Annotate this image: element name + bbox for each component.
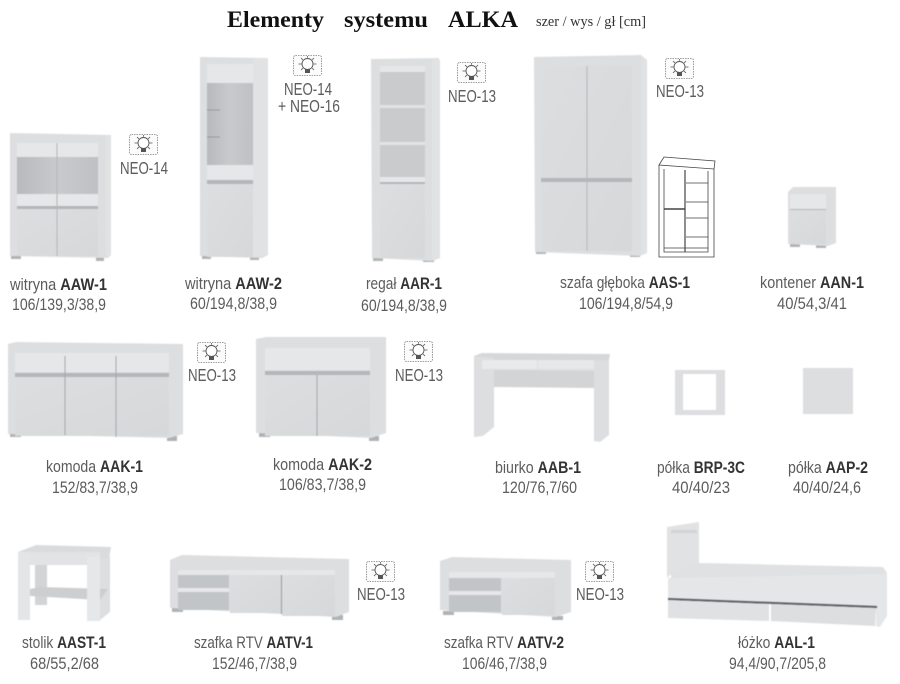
label: komoda AAK-2: komoda AAK-2 — [273, 455, 372, 474]
title — [227, 7, 646, 32]
light icon and label: NEO-13: NEO-13 — [357, 584, 405, 604]
label: kontener AAN-1 — [760, 273, 864, 313]
label: witryna AAW-1: 106/139,3/38,9 — [12, 295, 106, 314]
light icon and label: NEO-13 — [656, 58, 704, 101]
label: komoda AAK-1: komoda AAK-1 — [46, 457, 143, 476]
light icon and label: NEO-13 — [395, 342, 443, 385]
label: szafka RTV AATV-1: 152/46,7/38,9 — [212, 654, 297, 673]
label: szafka RTV AATV-1: szafka RTV AATV-1 — [194, 633, 313, 652]
label: lozko AAL-1 — [729, 633, 826, 673]
cabinet: komoda AAK-1 — [8, 342, 183, 441]
light icon and label: NEO-13: NEO-13 — [395, 365, 443, 385]
cabinet: szafa gleboka AAS-1 — [534, 55, 647, 257]
label: lozko AAL-1: łóżko AAL-1 — [738, 633, 815, 652]
cabinet: komoda AAK-2 — [256, 337, 386, 441]
cabinet: kontener AAN-1 — [788, 187, 836, 248]
desk: biurko AAB-1 — [474, 353, 610, 442]
label: polka BRP-3C: 40/40/23 — [672, 478, 730, 497]
label: witryna AAW-2 — [184, 274, 282, 313]
label: biurko AAB-1: 120/76,7/60 — [502, 478, 577, 497]
title: systemu — [344, 7, 428, 32]
light icon and label: NEO-13: NEO-13 — [188, 365, 236, 385]
label: witryna AAW-2: 60/194,8/38,9 — [190, 294, 277, 313]
label: stolik AAST-1: stolik AAST-1 — [22, 633, 106, 652]
cabinet: szafka RTV AATV-1 — [170, 555, 349, 620]
label: polka BRP-3C: półka BRP-3C — [657, 458, 745, 477]
title: Elementy — [227, 7, 325, 32]
label: szafka RTV AATV-2: szafka RTV AATV-2 — [444, 633, 564, 652]
label: kontener AAN-1: kontener AAN-1 — [760, 273, 864, 292]
light icon and label: NEO-13: NEO-13 — [448, 86, 496, 106]
light icon and label: NEO-14 — [120, 134, 168, 178]
table: stolik AAST-1 — [18, 545, 111, 621]
title: ALKA — [448, 7, 518, 32]
label: komoda AAK-1: 152/83,7/38,9 — [52, 478, 138, 497]
cabinet: witryna AAW-1 — [10, 133, 111, 261]
cabinet: witryna AAW-2 — [200, 57, 268, 260]
light icon and label: NEO-13 — [576, 562, 624, 604]
label: witryna AAW-1 — [9, 275, 107, 314]
light icon and label: NEO-14 + NEO-16: + NEO-16 — [278, 96, 340, 116]
label: polka BRP-3C — [657, 458, 745, 497]
light icon and label: NEO-13 — [188, 342, 236, 385]
label: biurko AAB-1 — [495, 458, 581, 497]
label: komoda AAK-2: 106/83,7/38,9 — [279, 475, 366, 494]
label: regal AAR-1: regał AAR-1 — [366, 274, 442, 293]
light icon and label: NEO-13: NEO-13 — [576, 584, 624, 604]
label: stolik AAST-1 — [22, 633, 106, 673]
label: szafka RTV AATV-1 — [194, 633, 313, 673]
label: stolik AAST-1: 68/55,2/68 — [30, 654, 99, 673]
light icon and label: NEO-14 + NEO-16: NEO-14 — [284, 79, 332, 99]
label: szafa gleboka AAS-1: 106/194,8/54,9 — [579, 294, 673, 313]
label: szafka RTV AATV-2: 106/46,7/38,9 — [462, 654, 547, 673]
shelf: polka BRP-3C — [675, 370, 725, 415]
label: szafka RTV AATV-2 — [444, 633, 564, 673]
label: komoda AAK-1 — [46, 457, 143, 497]
cabinet: regal AAR-1 — [371, 58, 440, 262]
label: komoda AAK-2 — [273, 455, 372, 494]
label: lozko AAL-1: 94,4/90,7/205,8 — [729, 654, 826, 673]
light icon and label: NEO-13 — [357, 562, 405, 604]
light icon and label: NEO-14: NEO-14 — [120, 158, 168, 178]
label: witryna AAW-1: witryna AAW-1 — [9, 275, 107, 294]
label: kontener AAN-1: 40/54,3/41 — [777, 294, 847, 313]
label: szafa gleboka AAS-1: szafa głęboka AAS-1 — [560, 273, 690, 292]
label: szafa gleboka AAS-1 — [560, 273, 690, 313]
light icon and label: NEO-13: NEO-13 — [656, 81, 704, 101]
label: biurko AAB-1: biurko AAB-1 — [495, 458, 581, 477]
label: polka AAP-2: półka AAP-2 — [788, 458, 868, 477]
cabinet: szafka RTV AATV-2 — [440, 557, 571, 620]
label: witryna AAW-2: witryna AAW-2 — [184, 274, 282, 293]
label: regal AAR-1: 60/194,8/38,9 — [361, 296, 447, 315]
line drawing: szafa interior — [659, 157, 715, 257]
bed: lozko AAL-1 — [667, 522, 887, 627]
label: regal AAR-1 — [361, 274, 447, 315]
label: polka AAP-2: 40/40/24,6 — [793, 478, 861, 497]
label: polka AAP-2 — [788, 458, 868, 497]
shelf: polka AAP-2 — [803, 368, 853, 414]
light icon and label: NEO-14 + NEO-16 — [278, 56, 340, 116]
light icon and label: NEO-13 — [448, 62, 496, 106]
title: szer / wys / gł [cm] — [536, 14, 646, 30]
